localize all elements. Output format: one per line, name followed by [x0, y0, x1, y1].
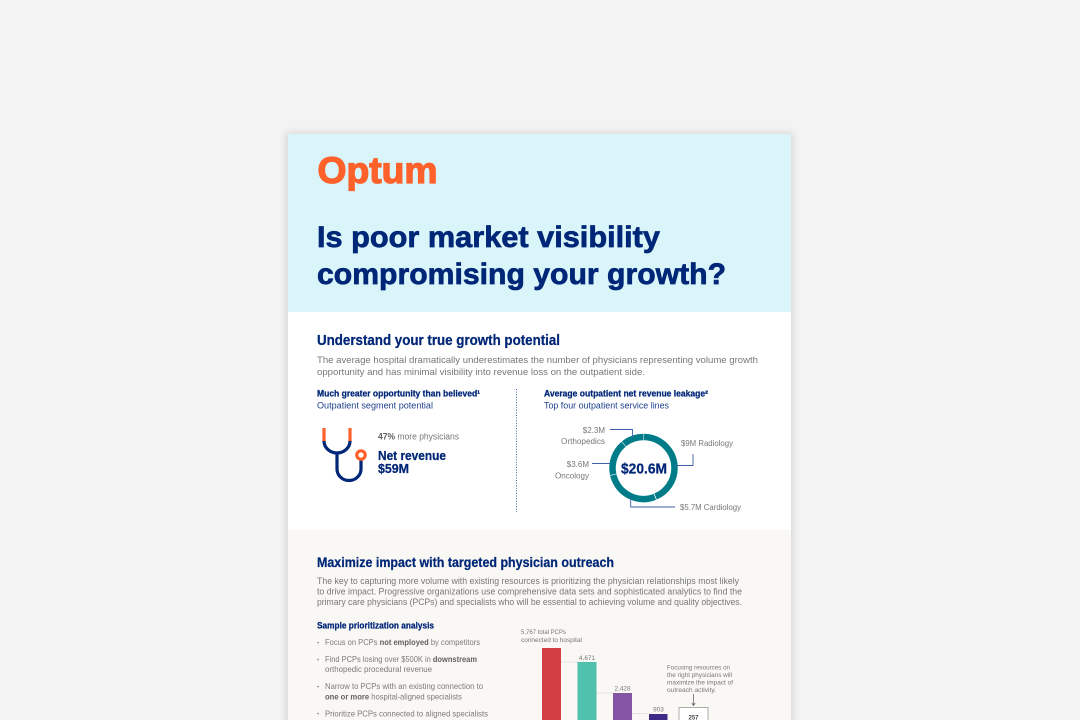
list: prioritization steps: Prioritize PCPs connected to aligned specialists — [325, 708, 488, 718]
stat: physicians and net revenue: $59M — [378, 462, 409, 476]
callout: focusing resources: Focusing resources on — [667, 664, 730, 672]
subheading: opportunity: Much greater opportunity than believed¹ — [317, 388, 480, 398]
label: radiology: $9M Radiology — [681, 439, 733, 448]
stat: physicians and net revenue — [378, 432, 459, 476]
panel: targeted outreach — [288, 530, 791, 720]
label: orthopedics — [561, 426, 632, 446]
subheading: leakage: Average outpatient net revenue leakage² — [544, 388, 708, 398]
text block: growth intro: opportunity and has minimal visibility into revenue loss on the outpatient side. — [317, 367, 645, 378]
label: 4,671: 4,671 — [579, 655, 595, 662]
callout: focusing resources: the right physicians will — [667, 672, 732, 679]
callout: focusing resources: maximize the impact of — [667, 680, 733, 686]
heading: growth potential: Understand your true growth potential — [317, 333, 560, 349]
text block: outreach intro: The key to capturing more volume with existing resources is prioritizing the physician relationships most likely — [317, 576, 739, 586]
subheading: sample analysis: Sample prioritization analysis — [317, 620, 434, 630]
list: prioritization steps: Find PCPs losing over $500K in downstream — [325, 654, 477, 664]
stat: physicians and net revenue: 47% more physicians — [378, 432, 459, 442]
panel: header — [288, 134, 791, 312]
bar chart: physician funnel — [521, 629, 668, 720]
label: cardiology: $5.7M Cardiology — [680, 503, 741, 512]
label: cardiology — [631, 497, 741, 512]
bar: 4,671 — [578, 662, 596, 720]
heading: outreach: Maximize impact with targeted physician outreach — [317, 554, 614, 570]
subheading: opportunity: Outpatient segment potential — [317, 400, 433, 410]
label: radiology — [675, 439, 733, 466]
bar: 903 — [649, 714, 668, 720]
text block: outreach intro: to drive impact. Progressive organizations use comprehensive data sets and sophisticated analytics to find the — [317, 586, 742, 596]
callout: focusing resources — [667, 664, 733, 694]
label: 2,428: 2,428 — [614, 686, 631, 692]
label: oncology: $3.6M — [567, 460, 589, 469]
label: oncology — [555, 460, 610, 480]
box: 257 physicians — [679, 708, 708, 720]
card shadow — [286, 133, 793, 720]
subheading: leakage: Top four outpatient service lines — [544, 400, 670, 410]
list: prioritization steps — [317, 637, 488, 718]
text block: growth intro — [317, 355, 758, 378]
label: oncology: Oncology — [555, 472, 589, 480]
label: total PCPs: 5,767 total PCPs — [521, 629, 566, 636]
icon: stethoscope — [324, 428, 365, 480]
text block: growth intro: The average hospital dramatically underestimates the number of physicians representing volume growth — [317, 355, 758, 366]
callout: focusing resources: outreach activity. — [667, 687, 716, 694]
bar: 2,428 — [613, 693, 632, 720]
subheading: leakage — [544, 388, 708, 410]
label: orthopedics: Orthopedics — [561, 437, 605, 446]
list: prioritization steps: orthopedic procedural revenue — [325, 664, 432, 674]
title: Is poor market visibility — [317, 221, 660, 254]
donut chart: revenue leakage: $20.6M — [621, 462, 667, 478]
title: compromising your growth? — [317, 258, 726, 291]
list: prioritization steps: Narrow to PCPs with an existing connection to — [325, 681, 483, 691]
panel: growth potential — [317, 333, 758, 512]
label: total PCPs: connected to hospital — [521, 637, 582, 644]
bar: total PCPs — [542, 648, 561, 720]
label: 903: 903 — [653, 706, 664, 714]
donut chart: revenue leakage — [600, 424, 687, 512]
text block: outreach intro — [317, 576, 742, 607]
label: total PCPs — [521, 629, 582, 644]
list: prioritization steps: Focus on PCPs not employed by competitors — [325, 637, 480, 647]
logo: Optum: Optum — [318, 150, 438, 191]
text block: outreach intro: primary care physicians (PCPs) and specialists who will be essential to achieving volume and quality objectives. — [317, 597, 742, 607]
subheading: opportunity — [317, 388, 480, 410]
label: orthopedics: $2.3M — [583, 426, 605, 435]
title — [317, 221, 726, 291]
list: prioritization steps: one or more hospital-aligned specialists — [325, 692, 462, 702]
document card — [288, 134, 791, 720]
stat: physicians and net revenue: Net revenue — [378, 449, 446, 463]
arrow: to final count — [692, 694, 695, 706]
